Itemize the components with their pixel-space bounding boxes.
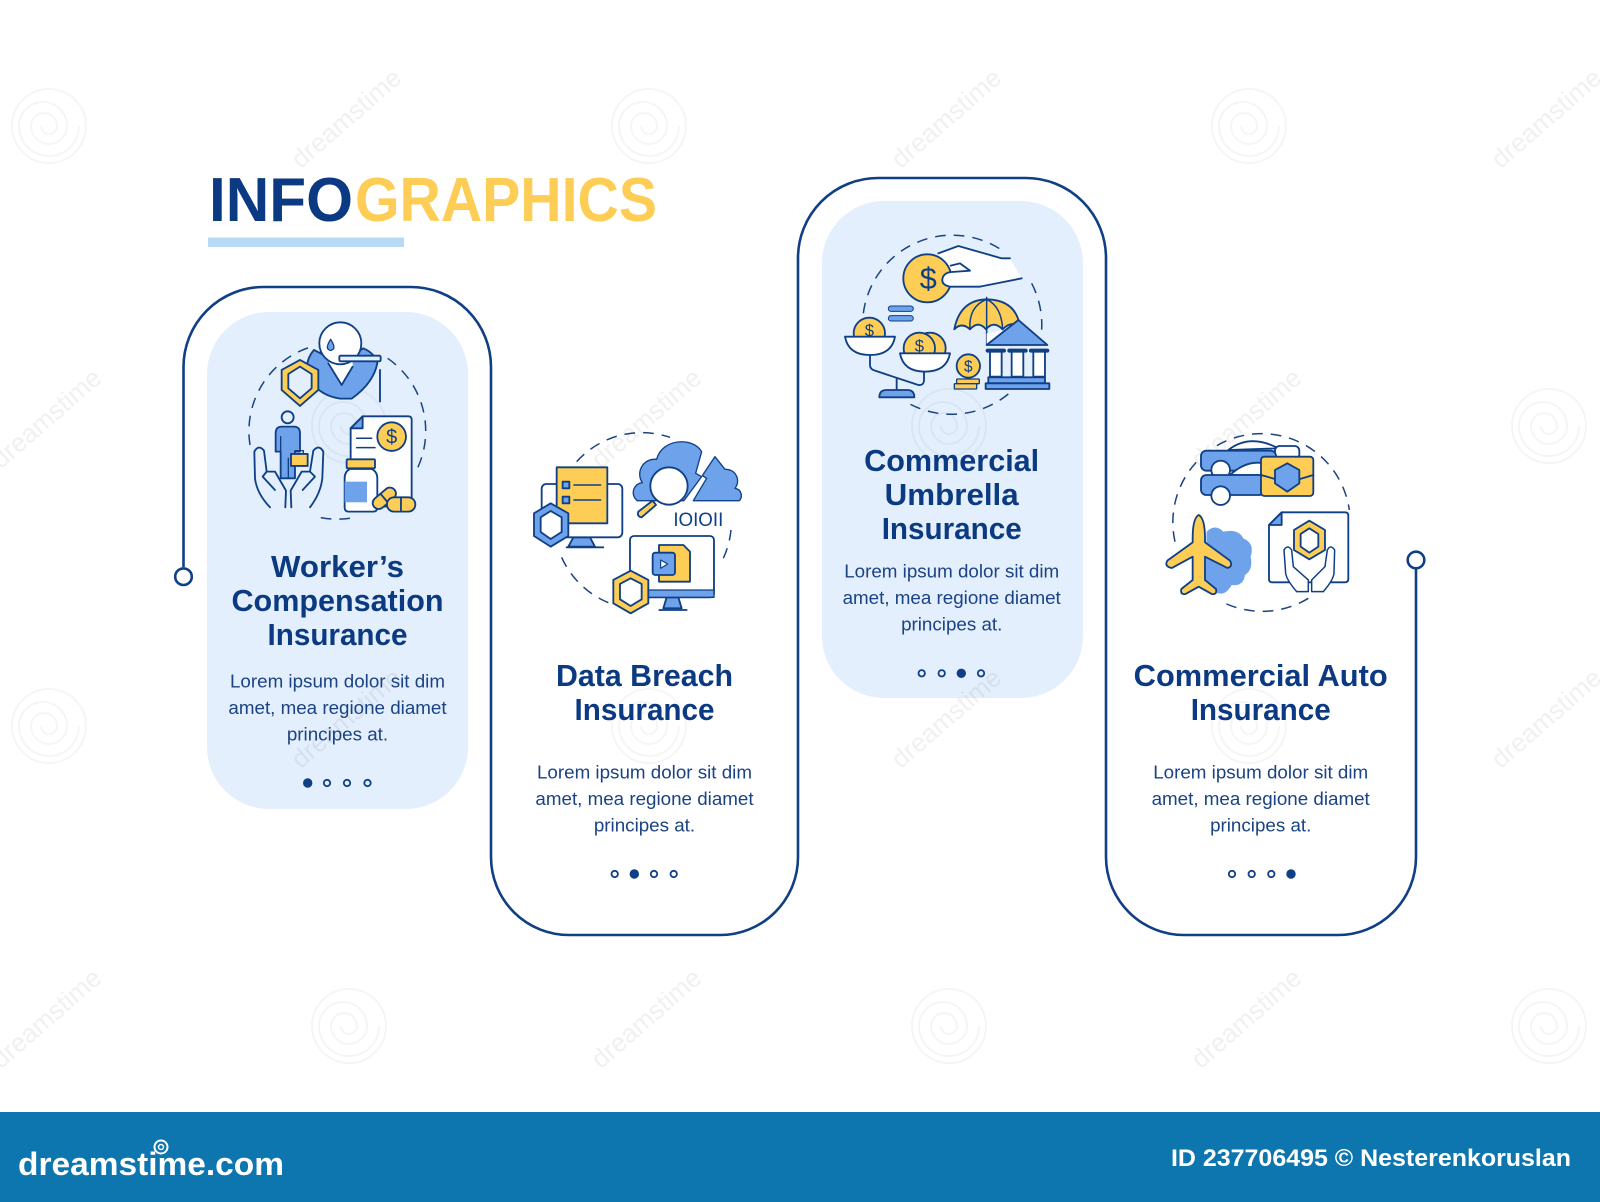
- text: Data Breach Insurance: Lorem ipsum dolor sit dim: [537, 761, 752, 782]
- monitor with video file: [613, 536, 714, 613]
- text: Commercial Umbrella Insurance: amet, mea regione diamet: [843, 587, 1062, 608]
- worker in hands: [254, 411, 323, 507]
- balance scale with coins: [845, 318, 950, 397]
- text: Worker's Compensation Insurance: principes at.: [287, 724, 388, 744]
- text: Commercial Umbrella Insurance: Insurance: [882, 512, 1022, 546]
- hand with coin: [903, 246, 1022, 302]
- title: GRAPHICS: [355, 166, 657, 235]
- text: Worker's Compensation Insurance: [228, 550, 447, 744]
- text: Data Breach Insurance: principes at.: [594, 814, 695, 836]
- footer image id and author: ID 237706495 © Nesterenkoruslan: [1171, 1145, 1571, 1172]
- yellow shield: [282, 360, 318, 406]
- pagination dots 1: [304, 779, 371, 787]
- footer logo: dreamstime.com: [18, 1146, 284, 1182]
- medicine bottle and pills: [345, 459, 415, 512]
- text: Commercial Auto Insurance: Lorem ipsum dolor sit dim: [1153, 761, 1368, 782]
- title underline: [208, 238, 404, 247]
- text: dreamstime: [885, 662, 1007, 774]
- text: Data Breach Insurance: Insurance: [574, 693, 714, 727]
- text: Worker's Compensation Insurance: amet, mea regione diamet: [228, 697, 447, 718]
- icon: commercial auto: [1166, 434, 1349, 611]
- equals sign: [888, 306, 913, 321]
- text: dreamstime: [585, 362, 707, 474]
- panel fill: Worker's Compensation: [207, 312, 468, 809]
- text: dreamstime: [285, 662, 407, 774]
- text: Commercial Auto Insurance: principes at.: [1210, 814, 1311, 836]
- icon: commercial umbrella: $: [865, 321, 874, 340]
- title: INFO: [209, 166, 353, 235]
- icon: data breach: [534, 433, 741, 613]
- binary digits: IOIOII: [673, 510, 723, 531]
- text: Data Breach Insurance: [535, 659, 754, 836]
- umbrella: [954, 297, 1020, 345]
- text: Commercial Auto Insurance: [1134, 659, 1388, 836]
- coin stack: [954, 354, 980, 389]
- cloud behind plane: [1205, 527, 1252, 594]
- text: Commercial Auto Insurance: Commercial Auto: [1134, 659, 1388, 693]
- icon: commercial umbrella: $: [915, 336, 924, 355]
- briefcase with shield: [1261, 457, 1313, 496]
- text: Commercial Auto Insurance: Insurance: [1191, 693, 1331, 727]
- text: dreamstime: [285, 62, 407, 174]
- back car: [1201, 441, 1299, 479]
- connector outline: [184, 178, 1416, 935]
- text: Data Breach Insurance: Data Breach: [556, 659, 733, 693]
- text: Commercial Umbrella Insurance: Lorem ipsum dolor sit dim: [844, 561, 1059, 582]
- text: Data Breach Insurance: amet, mea regione diamet: [535, 788, 754, 809]
- medical bill: [351, 416, 412, 507]
- text: Commercial Umbrella Insurance: [843, 444, 1062, 634]
- text: Commercial Umbrella Insurance: principes at.: [901, 614, 1002, 634]
- bank building: [986, 320, 1049, 389]
- icon: commercial umbrella: $: [964, 359, 973, 376]
- footer bar: [0, 1112, 1600, 1202]
- icon: worker's compensation: $: [386, 427, 397, 449]
- sick person with thermometer: [307, 322, 381, 402]
- pagination dots 4: [1229, 870, 1295, 878]
- monitor with document: [534, 467, 622, 547]
- pagination dots 2: [612, 870, 677, 878]
- cloud, lightning and magnifier: [633, 442, 741, 517]
- icon: worker's compensation: [249, 322, 426, 519]
- text: Commercial Auto Insurance: amet, mea regione diamet: [1152, 788, 1371, 809]
- text: dreamstime: [585, 962, 707, 1074]
- text: Commercial Umbrella Insurance: Commercial: [864, 444, 1039, 478]
- plane: [1166, 515, 1231, 594]
- connector start dot: [175, 568, 192, 585]
- text: Worker's Compensation Insurance: Compensation: [232, 584, 444, 618]
- document with shield and hands: [1269, 512, 1348, 592]
- icon: commercial umbrella: [845, 235, 1049, 414]
- panel fill: Commercial Umbrella: [822, 201, 1083, 698]
- text: Commercial Umbrella Insurance: Umbrella: [885, 478, 1020, 512]
- text: Worker's Compensation Insurance: Lorem ipsum dolor sit dim: [230, 671, 445, 692]
- front car: [1201, 463, 1264, 505]
- connector end dot: [1408, 552, 1424, 568]
- text: dreamstime: [885, 62, 1007, 174]
- pagination dots 3: [918, 670, 984, 677]
- title: [209, 166, 657, 235]
- text: dreamstime: [1185, 362, 1307, 474]
- text: Worker's Compensation Insurance: Insurance: [268, 618, 408, 652]
- icon: commercial umbrella: $: [920, 262, 937, 296]
- text: dreamstime: [1185, 962, 1307, 1074]
- text: Worker's Compensation Insurance: Worker’s: [271, 550, 404, 584]
